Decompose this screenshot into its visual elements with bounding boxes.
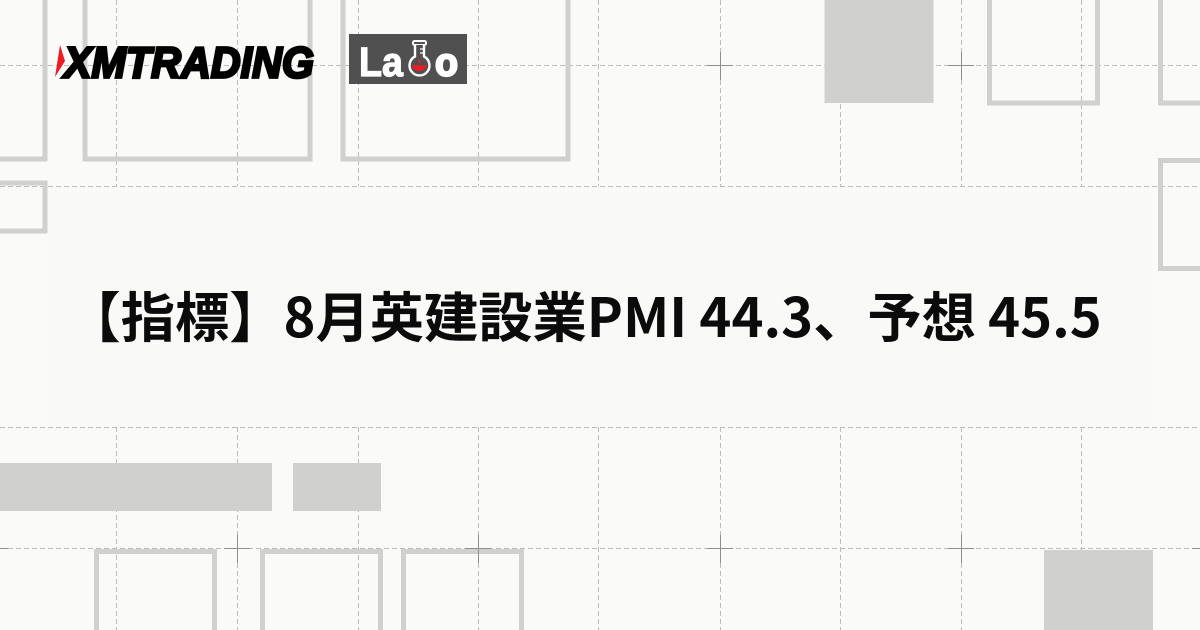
icon: flask — [410, 41, 430, 75]
logo: Lab — [349, 34, 467, 84]
badge background — [349, 34, 467, 84]
central title panel — [50, 187, 1150, 427]
letters La: La — [359, 39, 404, 84]
logo: XMTRADING — [55, 38, 314, 84]
letter o: o — [435, 42, 458, 84]
icon: red arrow — [55, 45, 65, 77]
title: 【指標】8月英建設業PMI 44.3、予想 45.5 — [66, 274, 1102, 353]
